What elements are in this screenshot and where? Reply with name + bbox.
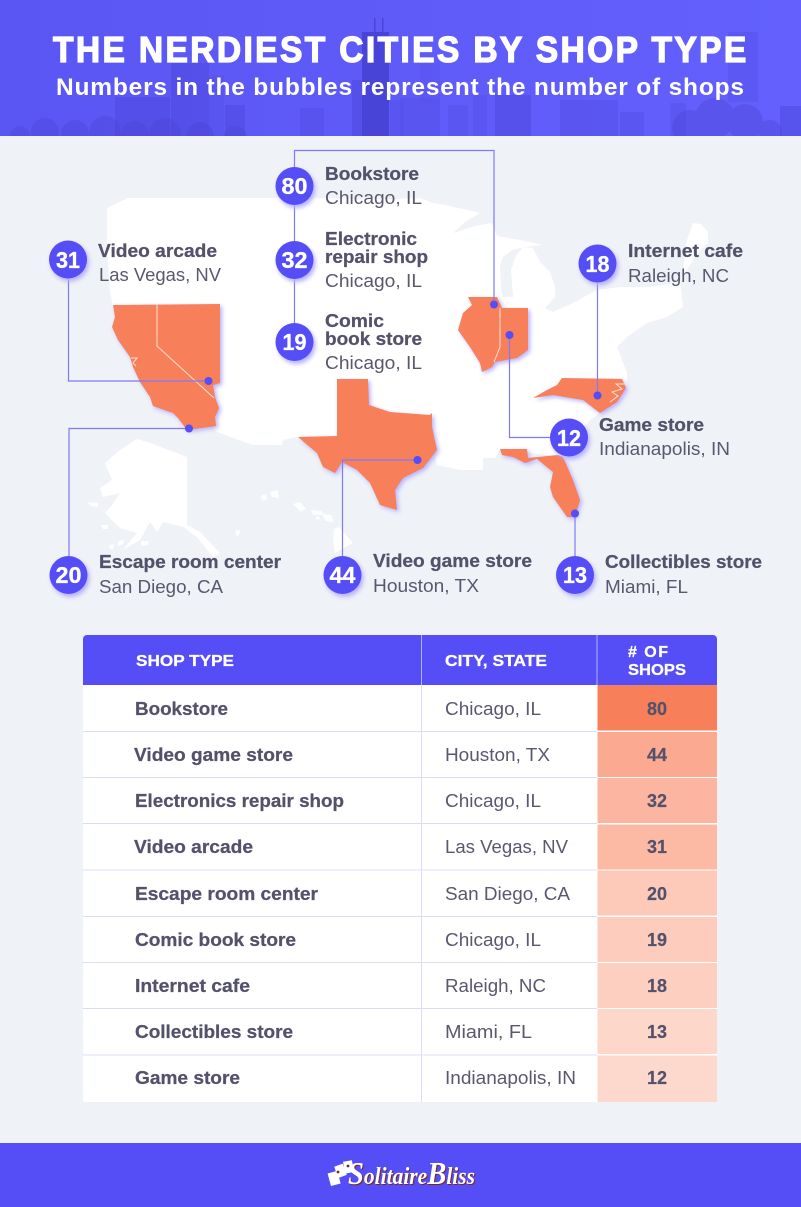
Hawaii [261, 490, 353, 553]
callout: Bookstore [276, 164, 422, 208]
shop count cells [598, 685, 717, 1102]
row: Game store: Game store [135, 1068, 240, 1088]
callout: Comic book store [276, 311, 422, 373]
callout: Escape room center [50, 552, 281, 597]
callout: Video game store: Video game store [373, 551, 532, 571]
callout: Electronic repair shop: repair shop [325, 247, 428, 267]
state: North Carolina [533, 378, 626, 413]
callout: Collectibles store: Collectibles store [605, 552, 762, 572]
callout: Video arcade: 31 [56, 247, 80, 273]
table header: SHOPS [628, 662, 686, 679]
callout: Game store: Indianapolis, IN [599, 439, 730, 459]
row: Escape room center [135, 884, 667, 904]
callout: Internet cafe: Internet cafe [628, 241, 743, 261]
row: Comic book store: 19 [647, 930, 667, 950]
row: Video arcade: Las Vegas, NV [445, 837, 568, 857]
row: Bookstore: Chicago, IL [445, 699, 541, 719]
callout: Video game store: Houston, TX [373, 576, 479, 596]
row: Video game store: 44 [647, 745, 667, 765]
row: Internet cafe [135, 976, 667, 996]
row: Comic book store [135, 930, 667, 950]
logo: Solitaire Bliss: SolitaireBliss [348, 1155, 475, 1191]
callout: Bookstore: Bookstore [325, 164, 419, 184]
callout: Collectibles store: Miami, FL [605, 577, 688, 597]
table body background [83, 685, 717, 1102]
state: Illinois and Indiana [458, 297, 528, 372]
table header: CITY, STATE [445, 653, 547, 670]
row: Video game store [134, 745, 667, 765]
callout: Game store: Game store [599, 415, 704, 435]
title: THE NERDIEST CITIES BY SHOP TYPE [53, 31, 746, 70]
row: Electronics repair shop: Electronics repair shop [135, 791, 344, 811]
row: Internet cafe: Internet cafe [135, 976, 250, 996]
row: Escape room center: San Diego, CA [445, 884, 570, 904]
row: Electronics repair shop: Chicago, IL [445, 791, 541, 811]
row: Electronics repair shop [135, 791, 667, 811]
row: Game store [135, 1068, 667, 1088]
row: Video arcade: 31 [647, 837, 667, 857]
row: Comic book store: Comic book store [135, 930, 296, 950]
state: California and Nevada [112, 304, 220, 430]
callout: Comic book store: Comic [325, 311, 384, 331]
header banner [0, 0, 801, 150]
callout: Escape room center: 20 [56, 562, 82, 588]
callout: Bookstore: Chicago, IL [325, 188, 422, 208]
row: Video arcade [134, 837, 667, 857]
row: Bookstore: 80 [647, 699, 667, 719]
Alaska islands [87, 502, 241, 549]
row: Video game store: Video game store [134, 745, 293, 765]
connector lines [68, 150, 598, 575]
row: Escape room center: 20 [647, 884, 667, 904]
callout: Comic book store: 19 [282, 329, 306, 355]
callout: Internet cafe: Raleigh, NC [628, 266, 729, 286]
row: Collectibles store: Collectibles store [135, 1022, 293, 1042]
callout: Electronic repair shop: 32 [282, 247, 308, 273]
row: Comic book store: Chicago, IL [445, 930, 541, 950]
callout: Electronic repair shop: Chicago, IL [325, 271, 422, 291]
callout: Escape room center: San Diego, CA [99, 577, 223, 597]
table header [83, 635, 717, 685]
row: Electronics repair shop: 32 [647, 791, 667, 811]
map of the United States [87, 198, 708, 557]
footer bar [0, 1143, 801, 1207]
contiguous US silhouette [107, 198, 708, 470]
state: Texas [298, 379, 437, 510]
callout: Comic book store: Chicago, IL [325, 353, 422, 373]
row: Game store: Indianapolis, IN [445, 1068, 576, 1088]
callout: Comic book store: book store [325, 329, 422, 349]
callout: Escape room center: Escape room center [99, 552, 281, 572]
callout: Internet cafe: 18 [586, 251, 610, 277]
callout: Electronic repair shop [276, 229, 428, 291]
state: Florida [500, 449, 580, 517]
callout: Video game store [324, 551, 532, 596]
data table [83, 635, 717, 1102]
callout: Bookstore: 80 [282, 173, 308, 199]
row: Video game store: Houston, TX [445, 745, 550, 765]
row: Internet cafe: 18 [647, 976, 667, 996]
callout: Collectibles store: 13 [563, 562, 587, 588]
callout: Video arcade [49, 240, 221, 285]
callout: Game store [550, 415, 730, 459]
Alaska [100, 439, 220, 557]
table header: SHOP TYPE [136, 653, 234, 670]
row: Bookstore: Bookstore [135, 699, 228, 719]
row: Collectibles store: 13 [647, 1022, 667, 1042]
callout: Collectibles store [556, 552, 762, 597]
row: Internet cafe: Raleigh, NC [445, 976, 546, 996]
row: Escape room center: Escape room center [135, 884, 318, 904]
callout: Internet cafe [578, 241, 743, 286]
callout: Video game store: 44 [330, 562, 356, 588]
table header: # OF [628, 644, 668, 661]
row: Collectibles store [135, 1022, 667, 1042]
location dots [185, 300, 602, 518]
row: Collectibles store: Miami, FL [445, 1022, 532, 1042]
row: Bookstore [135, 699, 667, 719]
row: Game store: 12 [647, 1068, 667, 1088]
row: Video arcade: Video arcade [134, 837, 253, 857]
subtitle: Numbers in the bubbles represent the number of shops [56, 74, 744, 101]
icon: playing cards [328, 1160, 354, 1186]
callout: Video arcade: Las Vegas, NV [99, 265, 221, 285]
callout: Game store: 12 [557, 425, 581, 451]
callout: Video arcade: Video arcade [98, 241, 217, 261]
callout: Electronic repair shop: Electronic [325, 229, 417, 249]
